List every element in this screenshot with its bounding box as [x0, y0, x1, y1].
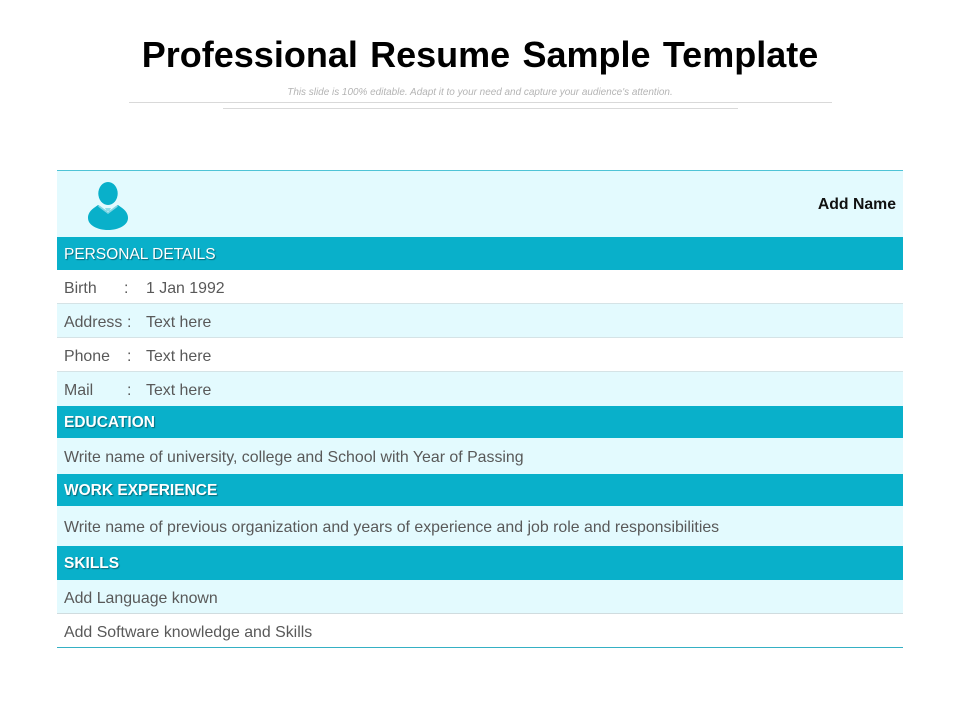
mail text: Mail: [64, 382, 93, 399]
language text: Add Language known: [64, 590, 218, 607]
heading: skills: SKILLS: [64, 555, 119, 572]
subtitle: This slide is 100% editable. Adapt it to your need and capture your audience's attention.: [287, 87, 673, 98]
phone text: Phone: [64, 348, 110, 365]
work experience text: Write name of previous organization and years of experience and job role and responsibilities: [64, 519, 719, 536]
row: mail: [57, 372, 903, 406]
section header: work experience: [57, 474, 903, 506]
education text: Write name of university, college and School with Year of Passing: [64, 449, 524, 466]
software text: Add Software knowledge and Skills: [64, 624, 312, 641]
mail text: [64, 382, 211, 399]
heading: work experience: WORK EXPERIENCE: [64, 482, 217, 499]
heading: personal details: PERSONAL DETAILS: [64, 246, 216, 263]
section header: education: [57, 406, 903, 438]
row: work experience: [57, 506, 903, 546]
row: language: [57, 580, 903, 614]
row: birth: [57, 270, 903, 304]
row: education: [57, 438, 903, 474]
address text: [64, 314, 211, 331]
row: address: [57, 304, 903, 338]
name label: Add Name: [818, 196, 896, 213]
mail text: Text here: [146, 382, 211, 399]
heading: education: EDUCATION: [64, 414, 155, 431]
mail text: :: [127, 382, 131, 399]
address text: :: [127, 314, 131, 331]
row: phone: [57, 338, 903, 372]
phone text: :: [127, 348, 131, 365]
birth text: 1 Jan 1992: [146, 280, 225, 297]
phone text: Text here: [146, 348, 211, 365]
birth text: :: [124, 280, 128, 297]
section header: personal details: [57, 237, 903, 270]
address text: Address: [64, 314, 122, 331]
birth text: [64, 280, 225, 297]
section header: skills: [57, 546, 903, 580]
title: Professional Resume Sample Template: [142, 34, 818, 75]
panel: name header: [57, 170, 903, 237]
phone text: [64, 348, 211, 365]
address text: Text here: [146, 314, 211, 331]
row: software: [57, 614, 903, 648]
icon: person: [88, 182, 128, 230]
birth text: Birth: [64, 280, 97, 297]
